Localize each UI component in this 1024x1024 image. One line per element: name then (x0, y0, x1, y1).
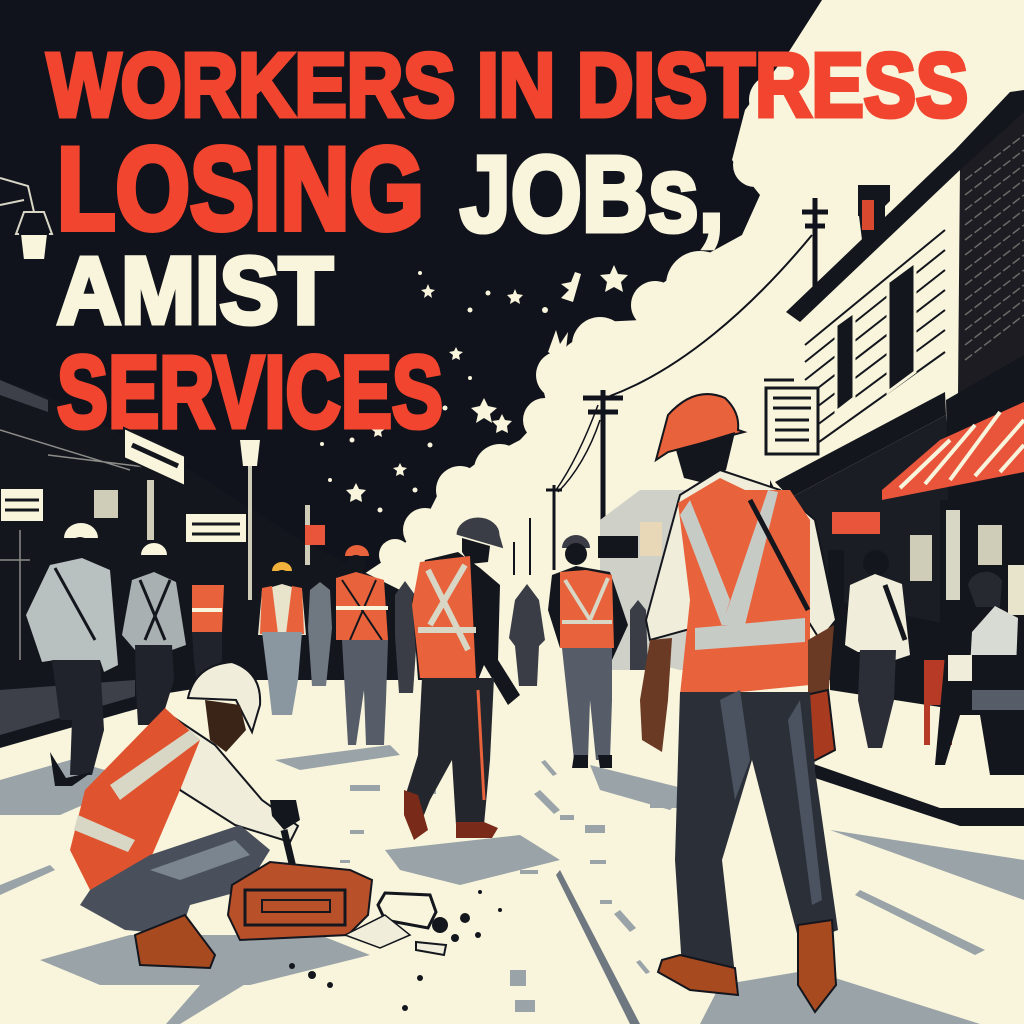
seated person with cafe tables right (924, 572, 1024, 775)
title: LOSING (57, 123, 424, 254)
boots (658, 955, 738, 995)
forearms (640, 638, 672, 752)
orange safety vest (678, 478, 810, 695)
tool bag (804, 690, 835, 762)
storefront right (770, 480, 1024, 720)
shirt sleeve (170, 715, 298, 842)
trousers (675, 692, 838, 975)
dark night sky with smoke edge (0, 0, 822, 700)
orange vest (70, 708, 200, 890)
distant buildings centre (598, 490, 700, 670)
sidewalk right (610, 660, 1024, 830)
title: AMIST (57, 238, 333, 344)
stars (320, 265, 628, 512)
head (676, 432, 735, 482)
utility poles and wires (514, 198, 828, 575)
main foreground worker (640, 394, 838, 1012)
worker second left (122, 543, 186, 725)
red striped awning (882, 402, 1024, 500)
arm and hammer (270, 800, 300, 830)
hard hat (188, 662, 260, 732)
hanging sign right (764, 380, 818, 454)
trousers (80, 825, 270, 935)
background crowd (308, 581, 648, 693)
head (205, 700, 246, 752)
central walking worker (404, 517, 520, 840)
worker right walking with shoulder bag (845, 550, 910, 748)
spilled can and debris (289, 890, 502, 1011)
worker centre right, phone (548, 535, 628, 768)
building right: white clapboard with brick side (775, 90, 1024, 650)
worker fifth, orange hat (336, 545, 388, 745)
torso and white sleeves (646, 470, 836, 640)
title (47, 36, 968, 449)
worker far left walking away (26, 523, 118, 786)
boots (135, 915, 215, 968)
worker fourth with vest and jeans (258, 562, 306, 715)
street shadows (0, 745, 1024, 1024)
worker orange vest third (190, 559, 236, 695)
title: JOBs, (460, 133, 724, 254)
street scene dark backdrop left (0, 380, 410, 720)
smoke billows along the sky edge (379, 74, 801, 571)
title: SERVICES (57, 335, 443, 449)
street lamp top left (0, 178, 52, 260)
crouching worker with toolbox (70, 662, 300, 968)
toolbox (228, 862, 372, 940)
street scene left: storefronts and signs (0, 380, 325, 748)
hard hat (656, 394, 744, 460)
